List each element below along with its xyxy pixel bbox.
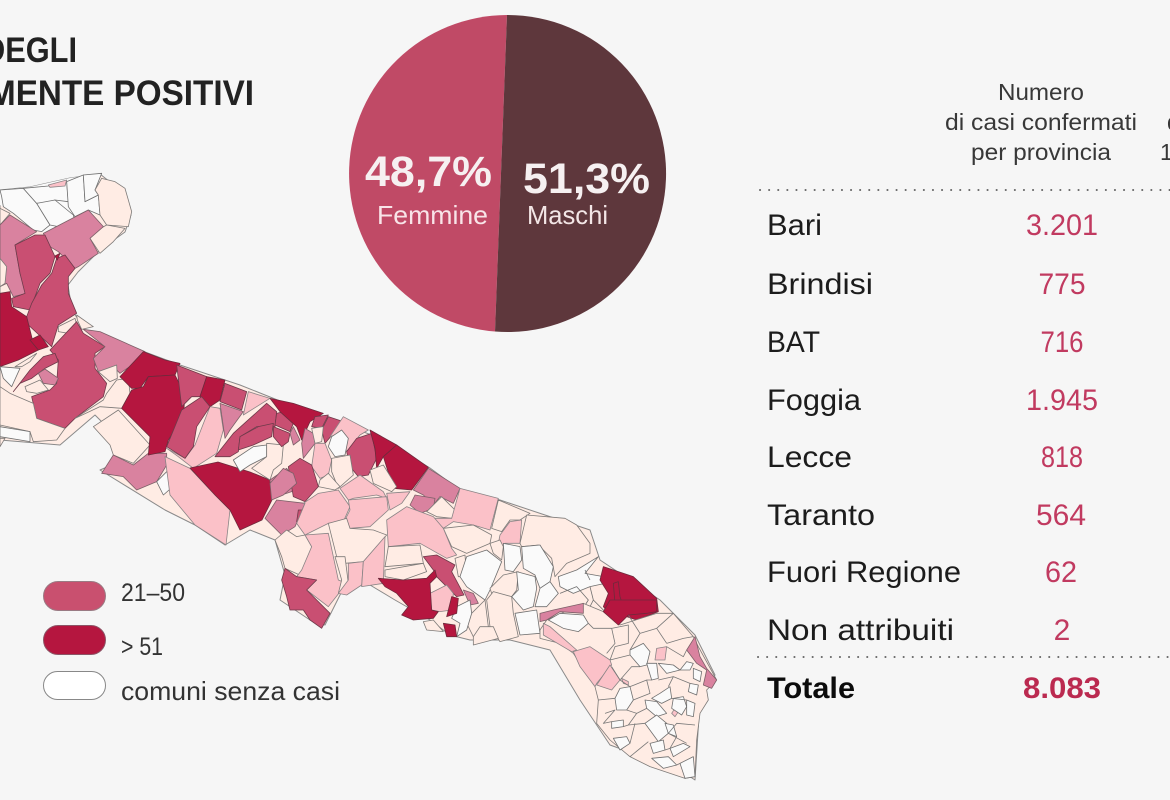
row: Fuori Regione: [767, 556, 1077, 589]
row: Bari: Bari: [767, 209, 822, 242]
row: Totale: [767, 672, 1101, 705]
row: Brindisi: 775: [1038, 268, 1086, 301]
row: Taranto: [767, 499, 1086, 532]
row: Non attribuiti: Non attribuiti: [767, 614, 954, 647]
pie chart: gender split: [349, 15, 666, 332]
row: Bari: 3.201: [1026, 209, 1098, 242]
row: BAT: 716: [1040, 326, 1084, 359]
row: Foggia: [767, 384, 1098, 417]
map: land silhouette: [0, 174, 715, 780]
row: Foggia: 1.945: [1026, 384, 1098, 417]
table: cases by province: [758, 79, 1170, 705]
legend item: 21-50: [44, 579, 185, 610]
row: Foggia: Foggia: [767, 384, 861, 417]
label: maschi: Maschi: [527, 200, 608, 230]
row: Lecce: Lecce: [767, 441, 852, 474]
table header: [945, 79, 1170, 165]
legend: [44, 579, 340, 706]
map: Gargano area without cases: [0, 174, 100, 235]
row: Taranto: Taranto: [767, 499, 875, 532]
table header: per provincia: [971, 139, 1111, 165]
legend item: 21-50: 21–50: [121, 579, 185, 607]
table header: di casi confermati: [945, 109, 1137, 135]
legend item: comuni senza casi: [44, 672, 340, 706]
row: Bari: [767, 209, 1098, 242]
row: BAT: [767, 326, 1084, 359]
map: northern area (Gargano and Foggia): [0, 173, 300, 545]
row: Totale: Totale: [767, 672, 855, 705]
row: Brindisi: [767, 268, 1086, 301]
row: Lecce: 818: [1041, 441, 1083, 474]
row: Non attribuiti: [767, 614, 1070, 647]
map of Puglia: [0, 173, 717, 780]
map: Salento: [540, 600, 717, 778]
title: [0, 31, 254, 113]
label: maschi: 51,3%: [523, 155, 650, 203]
row: Fuori Regione: Fuori Regione: [767, 556, 961, 589]
row: Totale: 8.083: [1023, 672, 1101, 705]
map: central area (Bari, Taranto, Brindisi): [265, 398, 658, 645]
pie slice: maschi: [495, 15, 666, 332]
label: femmine: 48,7%: [365, 148, 492, 196]
table header: Numero: [998, 79, 1084, 105]
row: BAT: BAT: [767, 326, 820, 359]
legend item: > 51: > 51: [121, 633, 163, 661]
row: Brindisi: Brindisi: [767, 268, 873, 301]
row: Fuori Regione: 62: [1045, 556, 1077, 589]
label: maschi: [523, 155, 650, 230]
label: femmine: [365, 148, 492, 230]
legend item: > 51: [44, 626, 163, 661]
row: Non attribuiti: 2: [1054, 614, 1070, 647]
label: femmine: Femmine: [377, 200, 488, 230]
legend item: comuni senza casi: comuni senza casi: [121, 676, 340, 706]
pie slice: femmine: [349, 15, 507, 332]
row: Taranto: 564: [1036, 499, 1086, 532]
row: Lecce: [767, 441, 1083, 474]
